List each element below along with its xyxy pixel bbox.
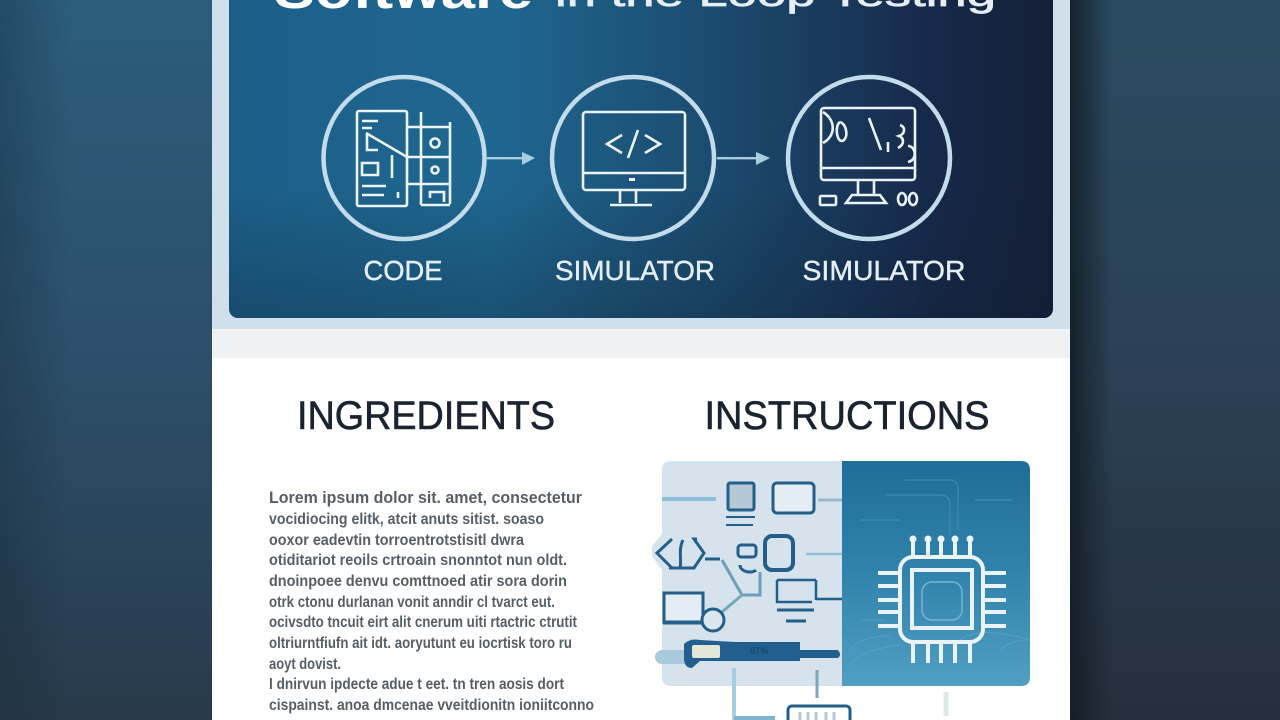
arrow: simulator to second simulator — [717, 152, 770, 165]
text block: ingredients body: ooxor eadevtin torroentrotstisitl dwra — [269, 532, 524, 549]
label: simulator: SIMULATOR — [555, 255, 715, 286]
step: simulator — [552, 77, 715, 286]
text block: ingredients body — [269, 489, 594, 714]
panel: header — [229, 0, 1053, 318]
text block: ingredients body: dnoinpoee denvu comttnoed atir sora dorin — [269, 573, 567, 590]
icon: simulator monitor — [552, 77, 714, 239]
heading: ingredients: INGREDIENTS — [297, 394, 555, 438]
text block: ingredients body: I dnirvun ipdecte adue t eet. tn tren aosis dort — [269, 676, 564, 693]
icon: simulator monitor with graph — [788, 77, 950, 239]
text block: ingredients body: oltriurntfiufn ait idt. aoryutunt eu iocrtisk toro ru — [269, 635, 572, 652]
poster card — [212, 0, 1070, 720]
icon: code circle — [324, 77, 484, 239]
text block: ingredients body: Lorem ipsum dolor sit. amet, consectetur — [269, 489, 583, 507]
panel: system diagram — [652, 461, 843, 686]
step: second simulator — [788, 77, 966, 286]
text block: ingredients body: otrk ctonu durlanan vonit anndir cl tvarct eut. — [269, 594, 555, 611]
text block: ingredients body: cispainst. anoa dmcenae vveitdionitn ioniitconno — [269, 697, 594, 714]
text block: ingredients body: vocidiocing elitk, atcit anuts sitist. soaso — [269, 511, 544, 528]
text block: ingredients body: otiditariot reoils crtroain snonntot nun oldt. — [269, 552, 567, 569]
label: second simulator: SIMULATOR — [802, 255, 966, 286]
heading: instructions: INSTRUCTIONS — [704, 394, 990, 438]
text block: ingredients body: ocivsdto tncuit eirt alit cnerum uiti rtactric ctrutit — [269, 614, 577, 631]
icon: soldering tool — [655, 640, 840, 668]
label: code: CODE — [364, 255, 442, 286]
step: code — [324, 77, 484, 286]
panel: chip — [842, 461, 1030, 686]
connector and lower device — [734, 668, 946, 720]
icon: soldering tool: 8T% — [750, 646, 769, 656]
text block: ingredients body: aoyt dovist. — [269, 656, 341, 673]
arrow: code to simulator — [487, 152, 535, 165]
diagram: instructions — [652, 461, 1030, 720]
icon: microchip — [878, 536, 1006, 663]
